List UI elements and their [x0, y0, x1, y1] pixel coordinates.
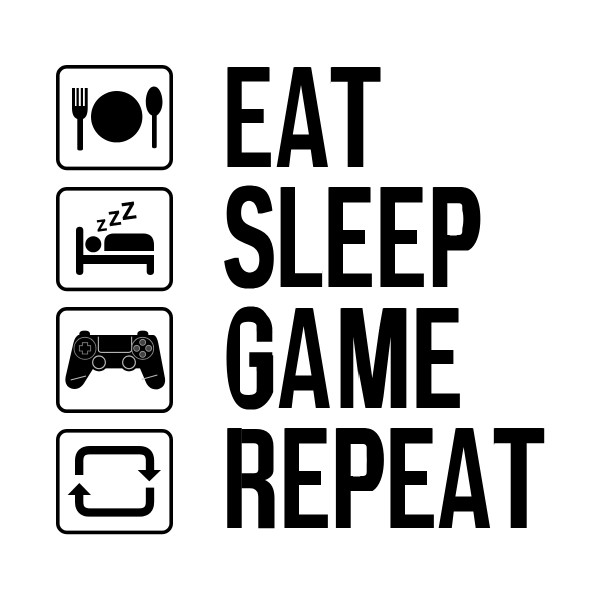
- grip lines: [71, 375, 157, 380]
- text: GAME: [224, 276, 460, 438]
- text: SLEEP: L: [276, 156, 318, 318]
- text: EAT: T: [330, 36, 375, 198]
- text: SLEEP: S: [222, 156, 273, 318]
- spoon: [146, 86, 162, 148]
- text: GAME: M: [334, 276, 404, 438]
- thumbstick bases: [90, 353, 108, 371]
- face buttons: [132, 337, 154, 359]
- icon: eat: [58, 67, 171, 168]
- snore letters: Z: [120, 197, 138, 226]
- shoulder buttons: [79, 331, 148, 335]
- blanket: [104, 234, 154, 251]
- bottom arrow: [68, 483, 150, 512]
- bed: [76, 227, 154, 275]
- icon: sleep: [58, 189, 171, 289]
- text: SLEEP: E: [324, 156, 368, 318]
- top arrow: [79, 450, 161, 481]
- text: REPEAT: R: [223, 397, 269, 559]
- text: EAT: E: [223, 36, 267, 198]
- icon box: repeat: [58, 431, 171, 532]
- icon box: sleep: [58, 189, 171, 289]
- d-pad: [74, 337, 96, 359]
- sleeper head: [85, 236, 101, 252]
- text: GAME: E: [412, 276, 457, 438]
- thumbsticks: [93, 356, 135, 369]
- text: REPEAT: E: [280, 397, 324, 559]
- repeat arrows: [68, 450, 161, 512]
- controller body: [65, 335, 165, 389]
- text: REPEAT: E: [386, 397, 430, 559]
- text: SLEEP: P: [428, 156, 476, 318]
- icon: repeat: [58, 431, 171, 532]
- text: REPEAT: A: [437, 397, 486, 559]
- snore letters: Z: [107, 207, 122, 231]
- text: GAME: A: [277, 276, 326, 438]
- text: REPEAT: T: [493, 397, 538, 559]
- icon box: game: [58, 309, 171, 411]
- snore letters: Z: [96, 217, 108, 235]
- text: GAME: G: [224, 276, 271, 438]
- controller: [65, 331, 165, 389]
- icon box: eat: [58, 67, 171, 168]
- text: SLEEP: [222, 156, 480, 318]
- touchpad: [98, 337, 132, 352]
- fork: [72, 88, 88, 150]
- plate: [91, 91, 142, 142]
- icon: game: [58, 309, 171, 411]
- text: REPEAT: [223, 397, 544, 559]
- text: EAT: [223, 36, 380, 198]
- text: SLEEP: E: [376, 156, 420, 318]
- text: REPEAT: P: [331, 397, 380, 559]
- text: EAT: A: [275, 36, 323, 198]
- snore letters: [96, 197, 138, 235]
